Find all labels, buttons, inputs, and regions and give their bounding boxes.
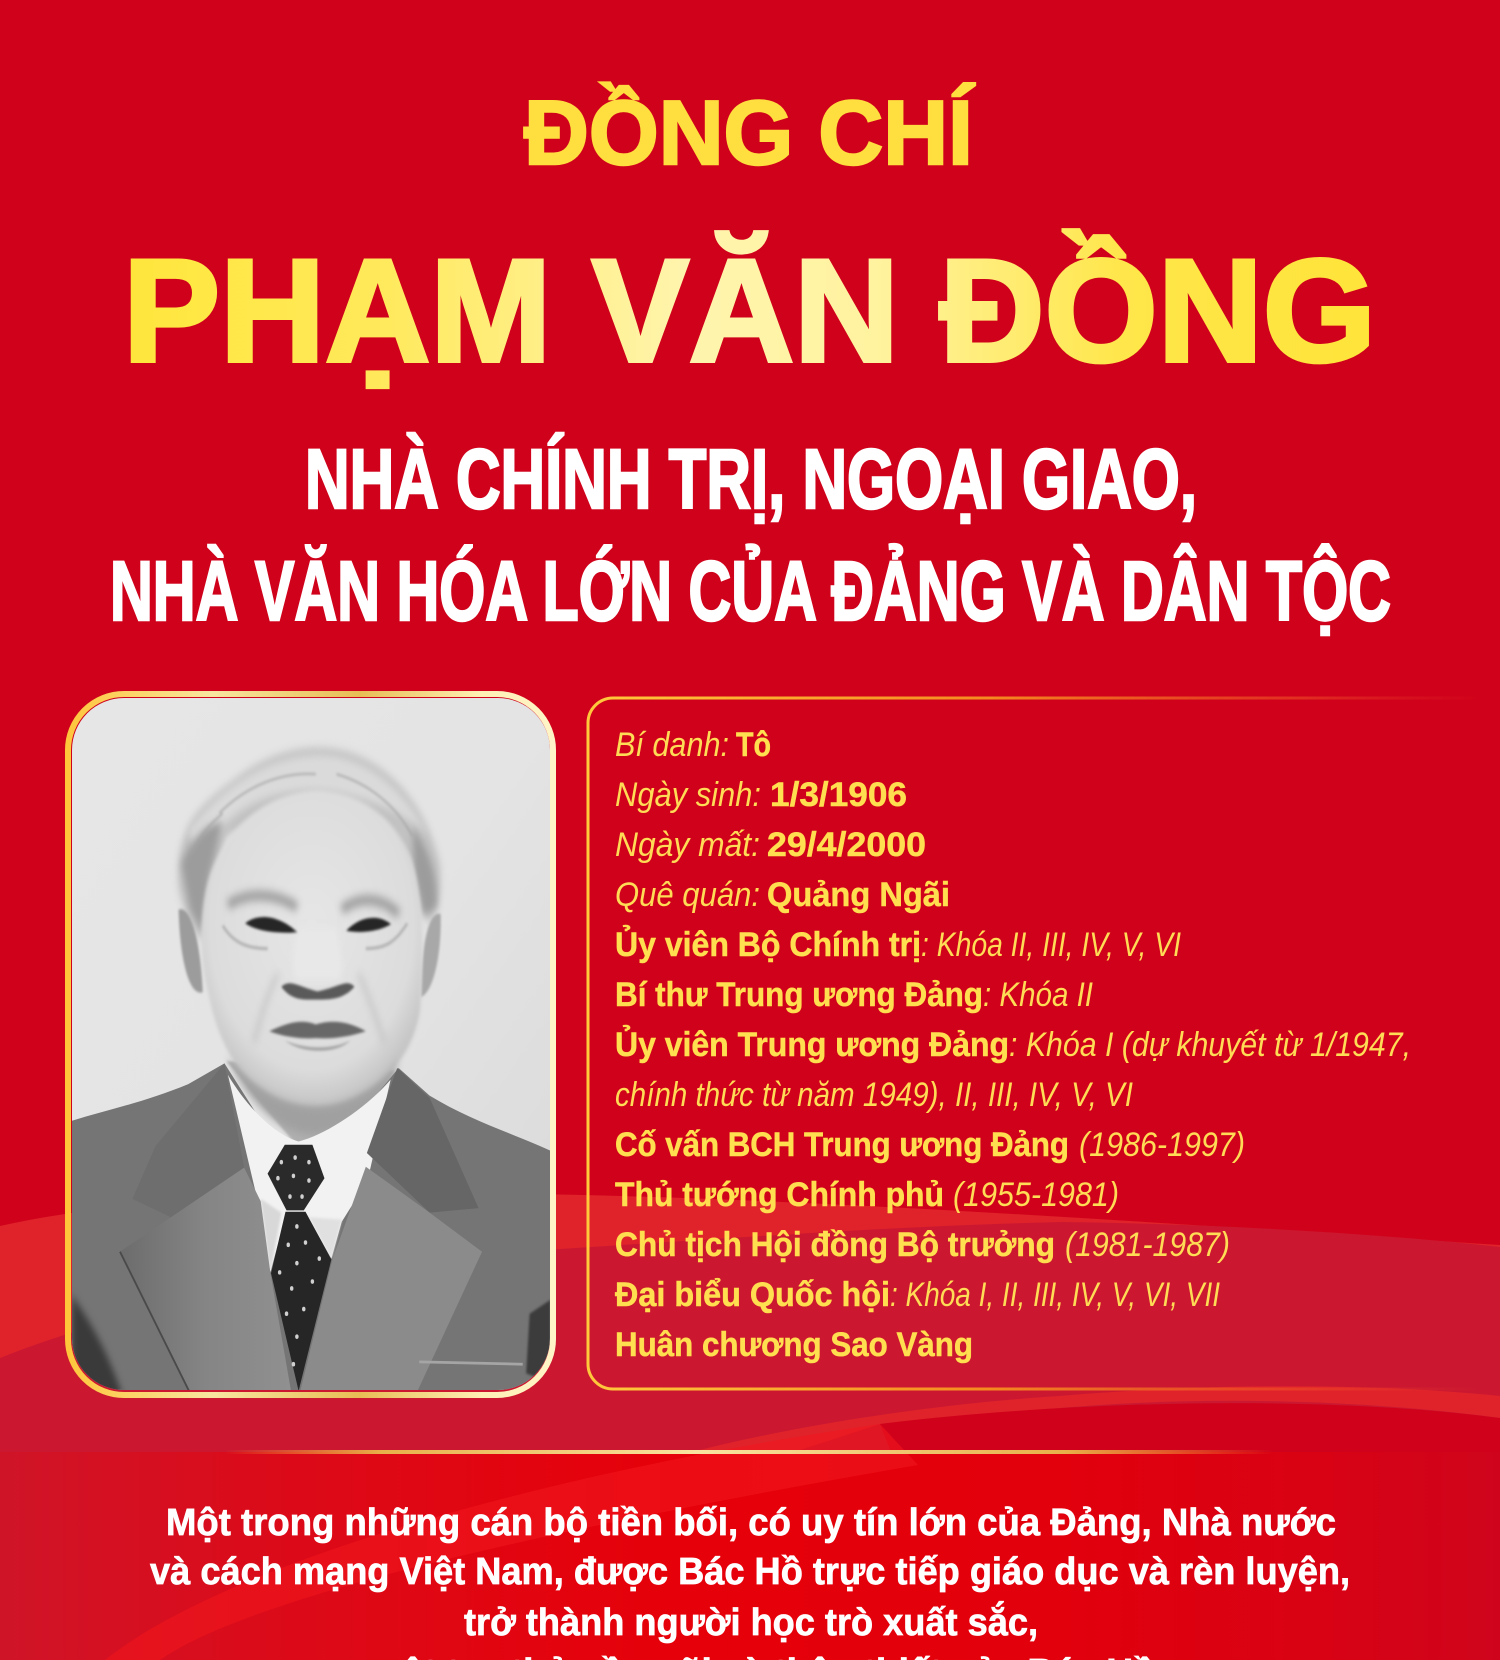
line: bí thư trung ương đảng: : Khóa II xyxy=(983,976,1093,1014)
shirt xyxy=(228,1075,391,1272)
closing text xyxy=(150,1502,1350,1660)
line: quê quán xyxy=(615,876,950,914)
line: bí thư trung ương đảng: Bí thư Trung ương Đảng xyxy=(615,976,983,1014)
line: thủ tướng xyxy=(615,1176,1119,1214)
photo frame xyxy=(68,694,553,1395)
line: bí danh: Tô xyxy=(736,726,771,764)
tie xyxy=(268,1145,331,1391)
face xyxy=(202,790,422,1107)
line: ủy viên bộ chính trị xyxy=(615,926,1181,964)
portrait photo xyxy=(68,694,554,1396)
line: ủy viên bộ chính trị: : Khóa II, III, IV, V, VI xyxy=(921,926,1181,964)
line: đại biểu: : Khóa I, II, III, IV, V, VI, VII xyxy=(890,1276,1220,1314)
subtitle: NHÀ CHÍNH TRỊ, NGOẠI GIAO, xyxy=(305,432,1197,526)
line: ủy viên trung ương đảng: : Khóa I (dự khuyết từ 1/1947, xyxy=(1009,1026,1411,1064)
neck xyxy=(226,1061,395,1144)
mouth xyxy=(269,1022,366,1038)
line: chủ tịch: Chủ tịch Hội đồng Bộ trưởng xyxy=(615,1226,1055,1264)
line: cố vấn: Cố vấn BCH Trung ương Đảng xyxy=(615,1126,1069,1164)
subtitle xyxy=(110,432,1391,638)
line: chủ tịch: (1981-1987) xyxy=(1065,1226,1230,1264)
panel: biography xyxy=(588,698,1480,1389)
brows and eyes xyxy=(228,896,297,907)
hair xyxy=(178,748,441,942)
divider xyxy=(225,1450,1273,1454)
line: đại biểu: Đại biểu Quốc hội xyxy=(615,1276,890,1314)
line: thủ tướng: Thủ tướng Chính phủ xyxy=(615,1176,944,1214)
suit xyxy=(72,1063,550,1396)
line: ủy viên trung ương đảng xyxy=(615,1026,1411,1064)
line: ngày sinh xyxy=(615,776,907,814)
line: quê quán: Quê quán: xyxy=(615,876,760,914)
lapels xyxy=(224,1064,225,1065)
line: chính thức: chính thức từ năm 1949), II, III, IV, V, VI xyxy=(615,1076,1133,1114)
line: ngày mất: Ngày mất: xyxy=(615,826,760,864)
line: huân chương: Huân chương Sao Vàng xyxy=(615,1326,973,1364)
line: thủ tướng: (1955-1981) xyxy=(953,1176,1119,1214)
closing text: Một trong những cán bộ tiền bối, có uy tín lớn của Đảng, Nhà nước xyxy=(166,1502,1336,1544)
nose xyxy=(292,930,298,934)
ears xyxy=(179,909,203,993)
line: bí danh: Bí danh: xyxy=(615,726,729,764)
line: ngày mất: 29/4/2000 xyxy=(767,826,926,864)
line: cố vấn: (1986-1997) xyxy=(1079,1126,1245,1164)
title: Đồng chí: ĐỒNG CHÍ xyxy=(524,82,976,184)
line: quê quán: Quảng Ngãi xyxy=(767,876,950,914)
closing text: trở thành người học trò xuất sắc, xyxy=(464,1600,1038,1644)
line: ủy viên trung ương đảng: Ủy viên Trung ương Đảng xyxy=(615,1026,1009,1064)
line: ngày mất xyxy=(615,826,926,864)
closing text: và cách mạng Việt Nam, được Bác Hồ trực tiếp giáo dục và rèn luyện, xyxy=(150,1551,1350,1593)
line: ngày sinh: Ngày sinh: xyxy=(615,776,761,814)
title: Phạm Văn Đồng: PHẠM VĂN ĐỒNG xyxy=(123,229,1376,392)
line: ủy viên bộ chính trị: Ủy viên Bộ Chính trị xyxy=(615,926,921,964)
line: ngày sinh: 1/3/1906 xyxy=(770,776,907,814)
line: đại biểu xyxy=(615,1276,1220,1314)
